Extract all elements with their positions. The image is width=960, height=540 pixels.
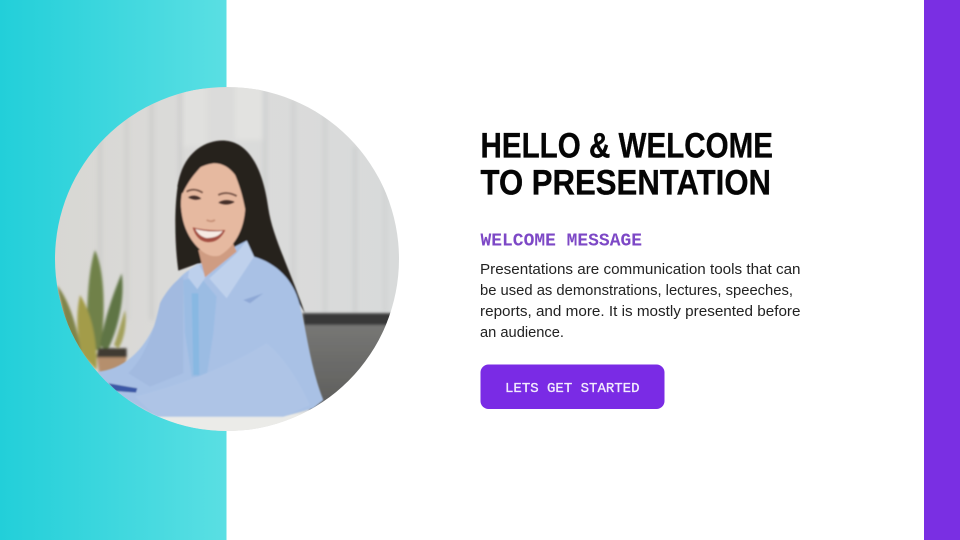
button: lets get started <box>480 364 664 409</box>
title: TO PRESENTATION <box>480 162 771 202</box>
title: HELLO & WELCOME <box>480 126 773 166</box>
hair back <box>175 140 305 313</box>
body paragraph: an audience. <box>480 324 564 341</box>
body paragraph: Presentations are communication tools that can <box>480 261 800 278</box>
chair <box>302 312 386 410</box>
plant <box>57 285 83 363</box>
panel: teal gradient left block <box>0 0 226 540</box>
panel: purple right bar <box>924 0 960 540</box>
button: lets get started: LETS GET STARTED <box>505 381 640 397</box>
body paragraph <box>480 261 800 341</box>
nose <box>207 220 215 221</box>
subheading: welcome message: WELCOME MESSAGE <box>480 232 642 252</box>
face <box>181 163 245 256</box>
shirt body <box>97 241 323 417</box>
desk <box>150 413 302 431</box>
eyes <box>188 196 201 200</box>
hair front <box>176 166 200 194</box>
title <box>480 126 773 202</box>
cup <box>97 355 127 374</box>
body paragraph: be used as demonstrations, lectures, speeches, <box>480 282 793 299</box>
body paragraph: reports, and more. It is mostly presented before <box>480 303 800 320</box>
collar <box>209 241 254 298</box>
brows <box>187 190 203 193</box>
cuff <box>108 383 137 393</box>
front arm <box>200 373 208 377</box>
shirt placket <box>183 277 217 377</box>
smile <box>193 227 225 242</box>
neck <box>198 243 237 277</box>
photo: smiling woman in blue shirt in a circular crop <box>50 80 410 440</box>
left sleeve shading <box>154 280 178 326</box>
